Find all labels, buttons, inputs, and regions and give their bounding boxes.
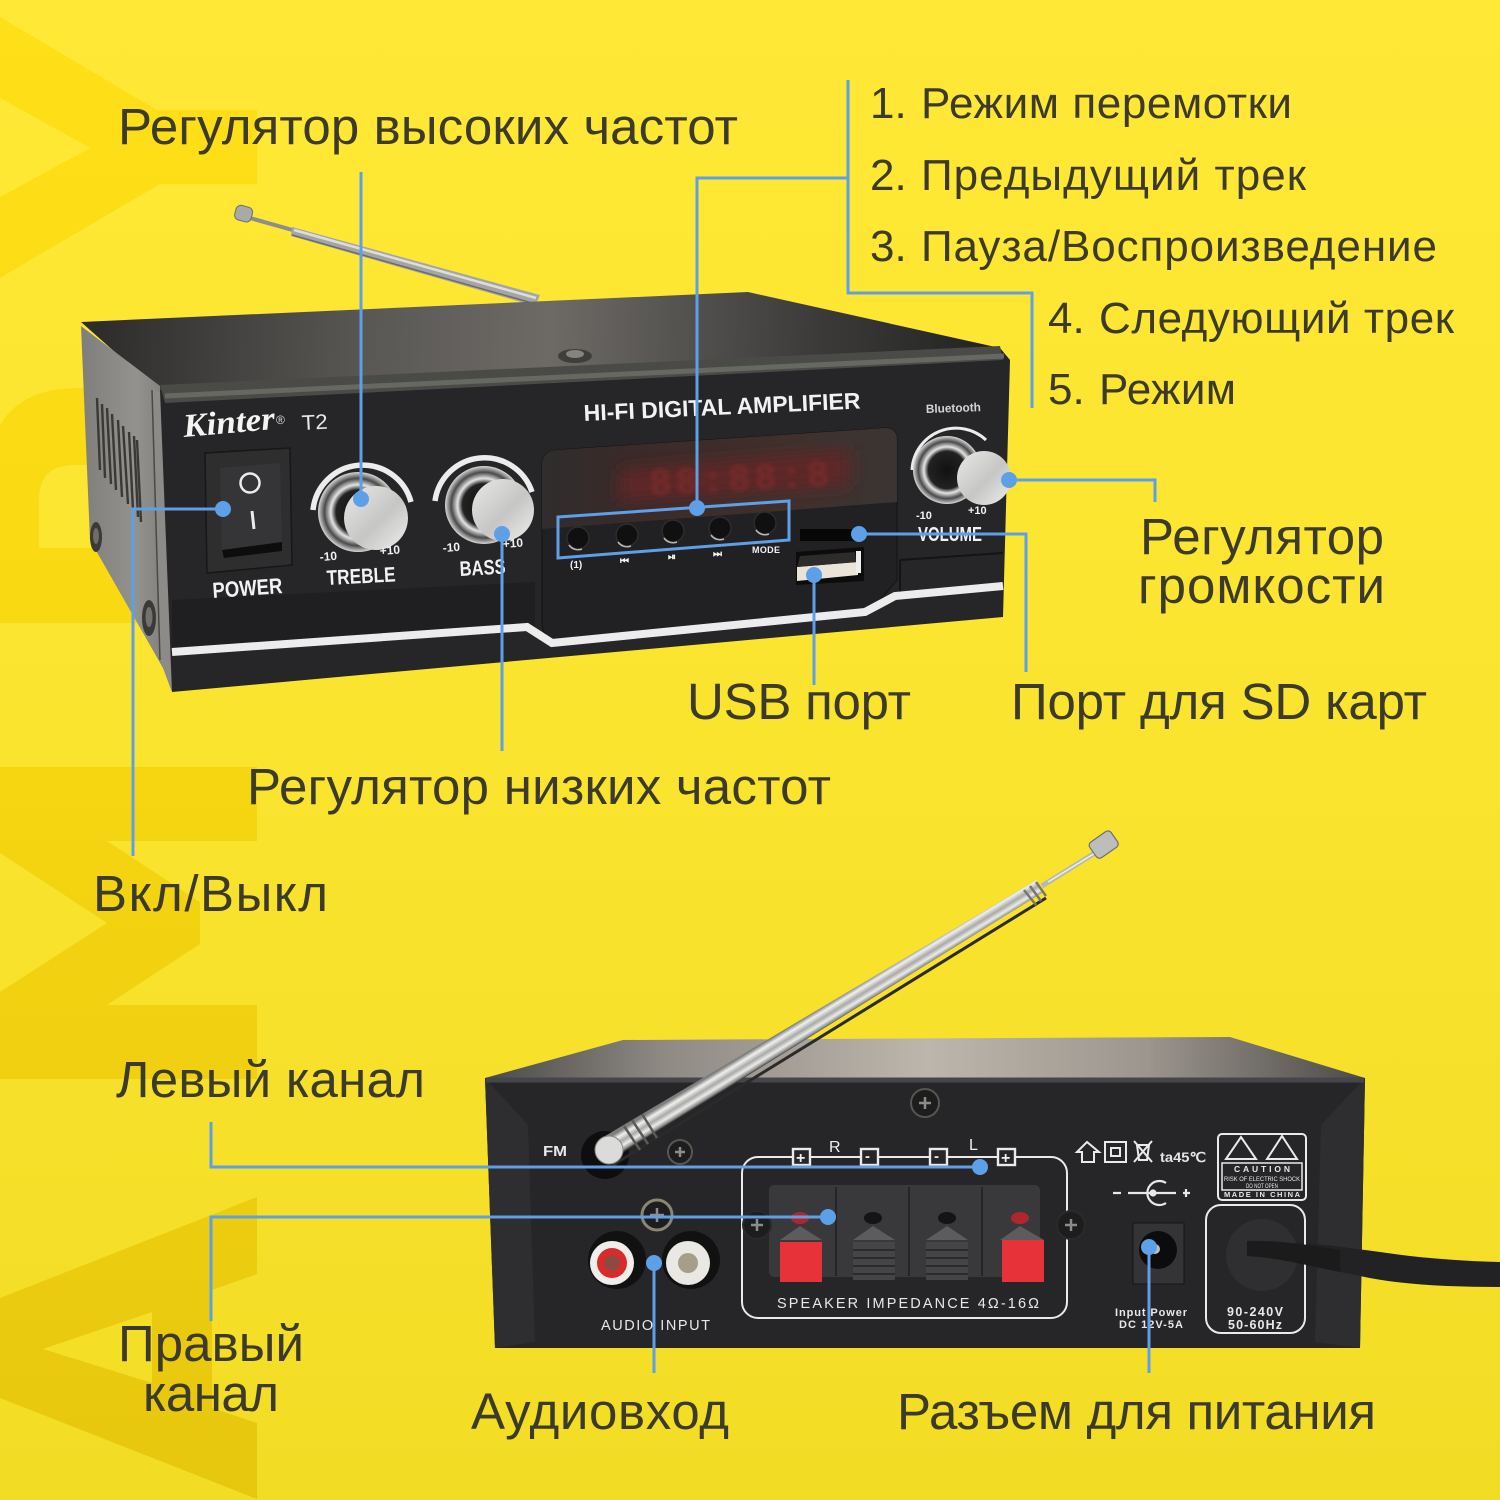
red LED digits: 88:88:8 (648, 456, 830, 507)
FM label: FM (543, 1143, 567, 1160)
marker dots (215, 472, 1157, 1271)
front panel (160, 346, 1010, 692)
label: SD: Порт для SD карт (1011, 673, 1427, 730)
power switch (205, 448, 292, 603)
list item 3: Пауза/Воспроизведение (921, 222, 1437, 271)
label: volume: громкости (1138, 557, 1385, 614)
button symbols: (1) (570, 560, 582, 571)
bass knob: BASS (459, 556, 506, 581)
front amplifier photo (81, 204, 1011, 692)
list item 1: Режим перемотки (921, 79, 1292, 128)
top face (81, 292, 1010, 392)
treble knob: TREBLE (326, 563, 396, 590)
list item 4: Следующий трек (1099, 294, 1455, 343)
list item 2: 2. (870, 151, 907, 200)
center control module (542, 387, 897, 640)
callout: volume (1009, 480, 1155, 502)
logo (180, 401, 328, 445)
list item 4: 4. (1048, 294, 1085, 343)
button symbols: ⏯ (668, 552, 676, 563)
label: power jack: Разъем для питания (897, 1383, 1376, 1440)
front silver stripe (172, 586, 1003, 652)
bass knob (435, 458, 534, 581)
top face (485, 1037, 1365, 1078)
logo: T2 (301, 411, 328, 435)
label: bass: Регулятор низких частот (247, 758, 831, 815)
logo: ® (276, 413, 285, 427)
polarity marks: - (865, 1148, 870, 1165)
button symbols: ⏮ (620, 556, 629, 567)
label: left channel: Левый канал (116, 1051, 425, 1108)
caution label: DO NOT OPEN (1246, 1184, 1278, 1190)
rear antenna (595, 829, 1120, 1165)
polarity marks: + (796, 1150, 805, 1167)
list item 1: 1. (870, 79, 907, 128)
callout: player buttons (697, 80, 1032, 508)
antenna tip ribs (1024, 882, 1046, 905)
mains input: 90-240V (1227, 1305, 1284, 1319)
label: audio input: Аудиовход (471, 1383, 729, 1440)
callout: power (133, 509, 223, 856)
list item 3: 3. (870, 222, 907, 271)
speaker terminals (742, 1137, 1067, 1318)
volume knob: -10 (916, 510, 932, 522)
certification icons: ta45℃ (1160, 1149, 1206, 1165)
list item 2: Предыдущий трек (921, 151, 1307, 200)
button symbols: MODE (752, 545, 780, 555)
side panel (81, 326, 172, 692)
callout: audio input (652, 1263, 656, 1373)
callout: power jack (1148, 1247, 1150, 1373)
treble knob: -10 (319, 549, 338, 564)
mains input: 50-60Hz (1228, 1318, 1282, 1332)
polarity marks (793, 1137, 1015, 1167)
caution label (1218, 1134, 1306, 1200)
polarity marks: - (934, 1148, 939, 1165)
callout: left channel (211, 1122, 980, 1167)
antenna base ribs (624, 1114, 657, 1150)
heading: HI-FI DIGITAL AMPLIFIER (583, 387, 861, 426)
treble knob: +10 (379, 543, 401, 558)
button frame (558, 501, 789, 558)
screws (642, 1089, 1085, 1239)
side vents (97, 398, 141, 522)
label: right channel: Правый (118, 1315, 304, 1372)
polarity marks: R (829, 1139, 841, 1156)
treble knob (313, 465, 411, 590)
DC polarity symbol (1113, 1181, 1190, 1205)
RCA audio inputs (588, 1231, 720, 1334)
rear panel (485, 1078, 1365, 1348)
volume knob (912, 400, 1011, 546)
polarity marks: + (1001, 1150, 1010, 1167)
volume knob: +10 (968, 505, 987, 517)
logo: Kinter (180, 401, 278, 445)
label: volume: Регулятор (1140, 508, 1384, 565)
caution label: CAUTION (1234, 1164, 1290, 1174)
terminal buttons (780, 1212, 1044, 1282)
SD slot (800, 529, 860, 541)
front antenna (233, 204, 540, 306)
side screws (90, 522, 156, 636)
player buttons (567, 512, 776, 550)
caution label: MADE IN CHINA (1224, 1190, 1301, 1199)
button symbols (570, 545, 780, 571)
volume knob: Bluetooth (926, 400, 981, 416)
caution label: RISK OF ELECTRIC SHOCK (1224, 1177, 1300, 1183)
USB port (796, 547, 864, 585)
label: right channel (118, 1315, 304, 1422)
top screw (558, 349, 592, 363)
polarity marks: L (969, 1137, 978, 1154)
RCA audio inputs: AUDIO INPUT (601, 1318, 710, 1334)
power switch: POWER (212, 573, 283, 603)
callout lines and dots (133, 80, 1157, 1373)
mains input (1206, 1205, 1340, 1333)
DC power jack: DC 12V-5A (1119, 1319, 1183, 1331)
button symbols: ⏭ (713, 549, 722, 560)
speaker terminals: SPEAKER IMPEDANCE 4Ω-16Ω (777, 1296, 1039, 1312)
power cable (1247, 1241, 1500, 1287)
terminal block (769, 1185, 1040, 1277)
callout: treble (360, 172, 362, 499)
label: USB: USB порт (687, 673, 911, 730)
callout: right channel (211, 1217, 828, 1321)
background watermark letters (0, 17, 258, 1499)
list item 5: Режим (1099, 365, 1236, 414)
volume knob: VOLUME (918, 524, 982, 546)
label: treble: Регулятор высоких частот (118, 98, 738, 155)
bass knob: -10 (442, 540, 461, 555)
label: volume (1138, 508, 1385, 614)
callout: bass (500, 534, 504, 751)
callout: USB port (812, 575, 816, 685)
list item 5: 5. (1048, 365, 1085, 414)
bass knob: +10 (502, 536, 524, 551)
button list (870, 79, 1455, 414)
DC power jack: Input Power (1115, 1307, 1188, 1319)
rear amplifier photo (485, 829, 1500, 1348)
FM socket (581, 1131, 629, 1179)
DC power jack (1115, 1223, 1188, 1331)
display window (542, 428, 897, 529)
callout: SD port (859, 534, 1026, 672)
certification icons (1077, 1141, 1206, 1165)
label: power: Вкл/Выкл (93, 865, 328, 922)
label: right channel: канал (143, 1365, 279, 1422)
